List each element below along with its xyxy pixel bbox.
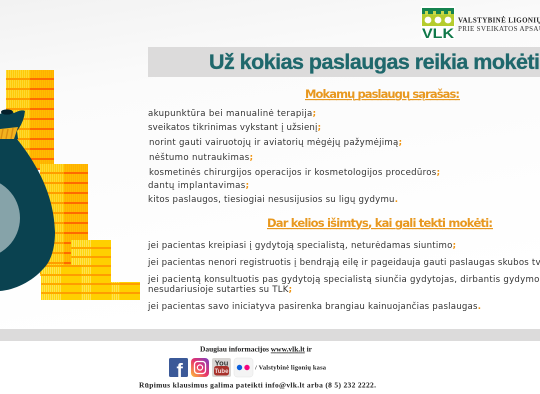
list: paid services: kosmetinės chirurgijos operacijos ir kosmetologijos procedūros; [149,168,440,178]
icon: flickr [234,358,253,377]
coin stack: middle [40,164,88,276]
logo: VLK: VLK [422,25,454,41]
logo: VLK [421,6,455,41]
icon: facebook: f [176,361,184,382]
footer band [0,329,540,341]
list: exceptions: nesudariusioje sutarties su TLK; [148,285,292,295]
icon: youtube: You [215,358,229,368]
list: paid services: akupunktūra bei manualinė terapija; [148,109,316,119]
footer: social account name: / Valstybinė ligonių kasa [254,364,327,372]
list: paid services: dantų implantavimas; [148,181,249,191]
icon: youtube: Tube [215,369,229,375]
list: exceptions: jei pacientas kreipiasi į gydytoją specialistą, neturėdamas siuntimo; [147,241,456,251]
footer: contact line: Rūpimus klausimus galima pateikti info@vlk.lt arba (8 5) 232 2222. [139,380,376,390]
list: paid services: sveikatos tikrinimas vykstant į užsienį; [148,123,321,133]
heading: paid services: Mokamų paslaugų sąrašas: [305,87,460,101]
icon: instagram [191,358,209,377]
list: exceptions: jei pacientas savo iniciatyva pasirenka brangiau kainuojančias paslaugas. [147,301,481,312]
icon: youtube [212,358,231,377]
coin stack: tall left [6,70,54,170]
footer: more information: Daugiau informacijos www.vlk.lt ir [200,344,313,354]
heading: exceptions: Dar kelios išimtys, kai gali tekti mokėti: [267,216,493,230]
footer area [0,341,540,394]
list: exceptions [147,241,540,312]
list: paid services: norint gauti vairuotojų ir aviatorių mėgėjų pažymėjimą; [149,138,402,148]
icon: facebook [169,358,188,382]
logo text [458,16,540,33]
illustration: money bag and coin stacks [0,70,140,300]
title banner: Už kokias paslaugas reikia mokėti [209,50,540,74]
money bag [0,109,55,291]
list: paid services [148,109,440,205]
title banner [148,47,540,77]
list: paid services: nėštumo nutraukimas; [149,152,253,163]
list: paid services: kitos paslaugos, tiesiogiai nesusijusios su ligų gydymu. [148,195,398,205]
coin stack: front low [41,240,140,300]
